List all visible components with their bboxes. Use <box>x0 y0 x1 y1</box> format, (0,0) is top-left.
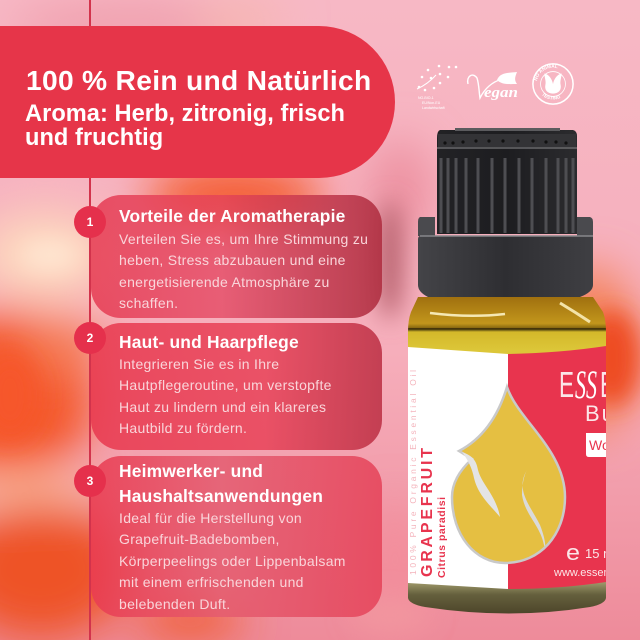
collar <box>418 217 593 297</box>
icon: EU organic leaf: EU/Non-EU <box>422 101 441 105</box>
icon: no animal testing badge <box>532 63 574 105</box>
product bottle <box>408 128 606 614</box>
icon: no animal testing badge: TESTING <box>542 92 560 100</box>
card 3 text: belebenden Duft. <box>119 596 230 612</box>
step number 2: 2 <box>87 331 93 345</box>
card 2 text: Haut zu lindern und ein klareres <box>119 399 326 415</box>
subtitle: und fruchtig <box>25 125 163 151</box>
card 3 text: Körperpeelings oder Lippenbalsam <box>119 553 346 569</box>
card 3 heading <box>119 461 323 506</box>
cap <box>437 128 577 234</box>
card 1 heading: Vorteile der Aromatherapie <box>119 206 346 226</box>
card 1 text: schaffen. <box>119 295 178 311</box>
brand text: Bu <box>585 401 616 426</box>
brand text: 15 m <box>585 546 614 561</box>
card 3: home and household <box>91 456 382 617</box>
timeline line <box>89 0 91 640</box>
card 2 text: Hautpflegeroutine, um verstopfte <box>119 377 332 393</box>
step number 1 <box>74 206 106 238</box>
card 1 text <box>119 231 368 311</box>
card 3 text: Ideal für die Herstellung von <box>119 510 302 526</box>
icon: EU organic leaf: Landwirtschaft <box>422 106 445 110</box>
card 3 text: mit einem erfrischenden und <box>119 574 304 590</box>
icon: golden drop <box>452 387 565 563</box>
header banner <box>0 26 395 178</box>
card 2: skin and hair <box>91 323 382 450</box>
card 3 text <box>119 510 346 612</box>
card 2 text: Integrieren Sie es in Ihre <box>119 356 279 372</box>
card 3 heading: Heimwerker- und <box>119 461 263 481</box>
brand text: www.essen <box>553 567 610 579</box>
icon: vegan mark: egan <box>484 85 518 101</box>
brand text: E <box>600 364 615 405</box>
label: product text: 100% Pure Organic Essential Oil <box>408 370 418 575</box>
subtitle: Aroma: Herb, zitronig, frisch <box>25 101 345 127</box>
title: 100 % Rein und Natürlich <box>26 64 372 96</box>
step number 3 <box>74 465 106 497</box>
icon: EU organic leaf <box>416 64 458 110</box>
brand text: E <box>559 364 574 405</box>
label <box>408 346 616 589</box>
step number 3: 3 <box>87 474 93 488</box>
icon: vegan mark <box>467 72 518 101</box>
label: product text: GRAPEFRUIT <box>419 448 436 577</box>
step number 1: 1 <box>87 215 93 229</box>
card 2 text: Hautbild zu fördern. <box>119 420 247 436</box>
step number 2 <box>74 322 106 354</box>
brand text: e <box>566 540 580 565</box>
brand text <box>554 371 606 576</box>
card 1: aromatherapy <box>91 195 382 318</box>
card 3 heading: Haushaltsanwendungen <box>119 486 323 506</box>
card 2 heading: Haut- und Haarpflege <box>119 332 299 352</box>
card 1 text: energetisierende Atmosphäre zu <box>119 274 330 290</box>
icon: EU organic leaf: NO-BIO-1 <box>418 96 434 100</box>
card 1 text: Verteilen Sie es, um Ihre Stimmung zu <box>119 231 368 247</box>
icon: no animal testing badge: NO ANIMAL <box>534 64 558 81</box>
brand text: SS <box>575 362 597 407</box>
card 2 text <box>119 356 332 436</box>
card 1 text: heben, Stress abzubauen und eine <box>119 252 346 268</box>
label: product text <box>408 370 448 578</box>
card 3 text: Grapefruit-Badebomben, <box>119 531 280 547</box>
brand text: Wo <box>589 437 610 453</box>
bottle glass <box>408 297 606 614</box>
label: product text: Citrus paradisi <box>436 497 448 578</box>
subtitle <box>25 101 345 151</box>
